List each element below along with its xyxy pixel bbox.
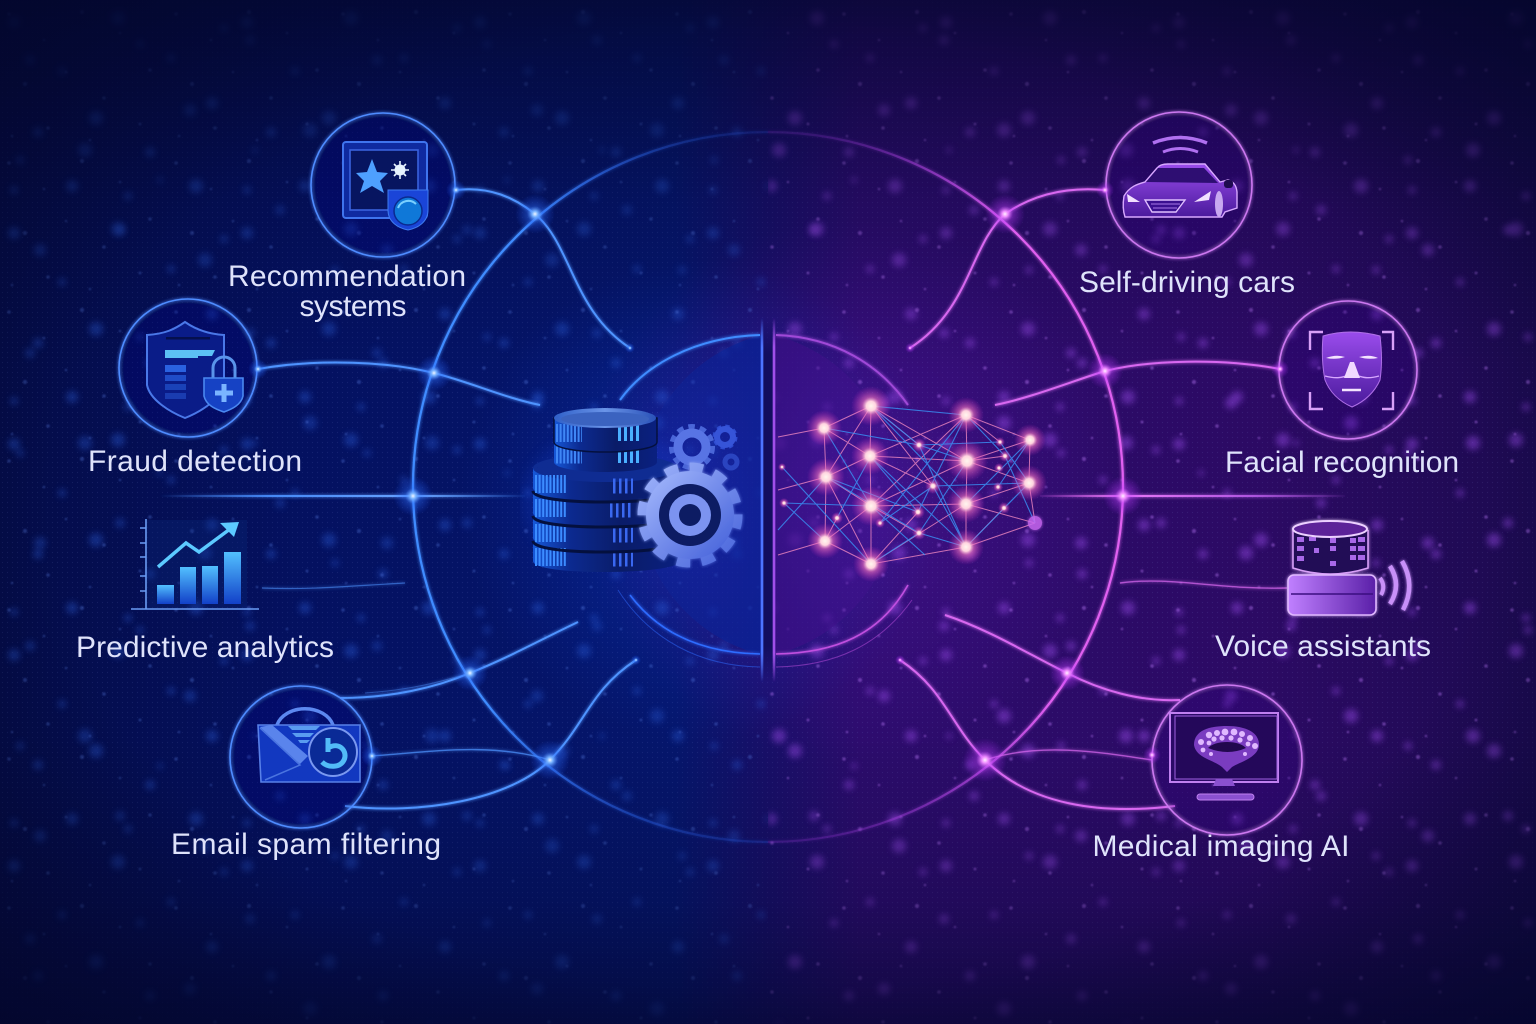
icon: face scan bbox=[1310, 332, 1393, 409]
label: email spam filtering: Email spam filtering bbox=[171, 828, 441, 861]
label: voice assistants: Voice assistants bbox=[1215, 630, 1431, 663]
large blue arc bbox=[413, 132, 768, 842]
label: predictive analytics: Predictive analytics bbox=[76, 631, 334, 664]
lower database stack bbox=[533, 454, 680, 572]
icon: bar chart with rising arrow bbox=[131, 519, 259, 609]
left connector lines bbox=[160, 189, 636, 809]
icon: shield and lock bbox=[147, 322, 243, 418]
upper database stack bbox=[554, 408, 657, 472]
panel: fraud detection bbox=[88, 299, 302, 478]
panel: facial recognition bbox=[1225, 301, 1459, 479]
label: self-driving cars: Self-driving cars bbox=[1079, 266, 1295, 299]
panel: email spam filtering bbox=[171, 686, 441, 861]
central split hub: inner semicircles and divider bbox=[618, 318, 912, 682]
icon: neural network bbox=[778, 386, 1047, 582]
icon: monitor with brain scan bbox=[1170, 713, 1278, 800]
label: medical imaging AI: Medical imaging AI bbox=[1092, 830, 1350, 863]
panel: medical imaging AI bbox=[1092, 685, 1350, 863]
large gear bbox=[644, 469, 736, 561]
panel: voice assistants bbox=[1215, 521, 1431, 663]
large purple arc bbox=[768, 132, 1123, 842]
icon: car with signal waves bbox=[1123, 138, 1237, 217]
small gears bbox=[673, 427, 737, 468]
label: fraud detection: Fraud detection bbox=[88, 445, 302, 478]
label: recommendation systems: Recommendation bbox=[228, 260, 466, 293]
label: facial recognition: Facial recognition bbox=[1225, 446, 1459, 479]
panel: self-driving cars bbox=[1079, 112, 1295, 299]
panel: predictive analytics bbox=[76, 519, 334, 664]
icon: smart speaker with sound waves bbox=[1288, 521, 1409, 615]
panel: recommendation systems: systems bbox=[300, 290, 406, 323]
junction nodes bbox=[393, 194, 1143, 782]
icon: recommendation card bbox=[343, 142, 428, 230]
icon: database with gears bbox=[520, 408, 737, 572]
icon: envelope with badge bbox=[258, 709, 360, 782]
icon anchors: circle contact points bbox=[248, 180, 1289, 767]
panel: recommendation systems bbox=[228, 113, 466, 323]
right connector lines bbox=[900, 189, 1345, 809]
